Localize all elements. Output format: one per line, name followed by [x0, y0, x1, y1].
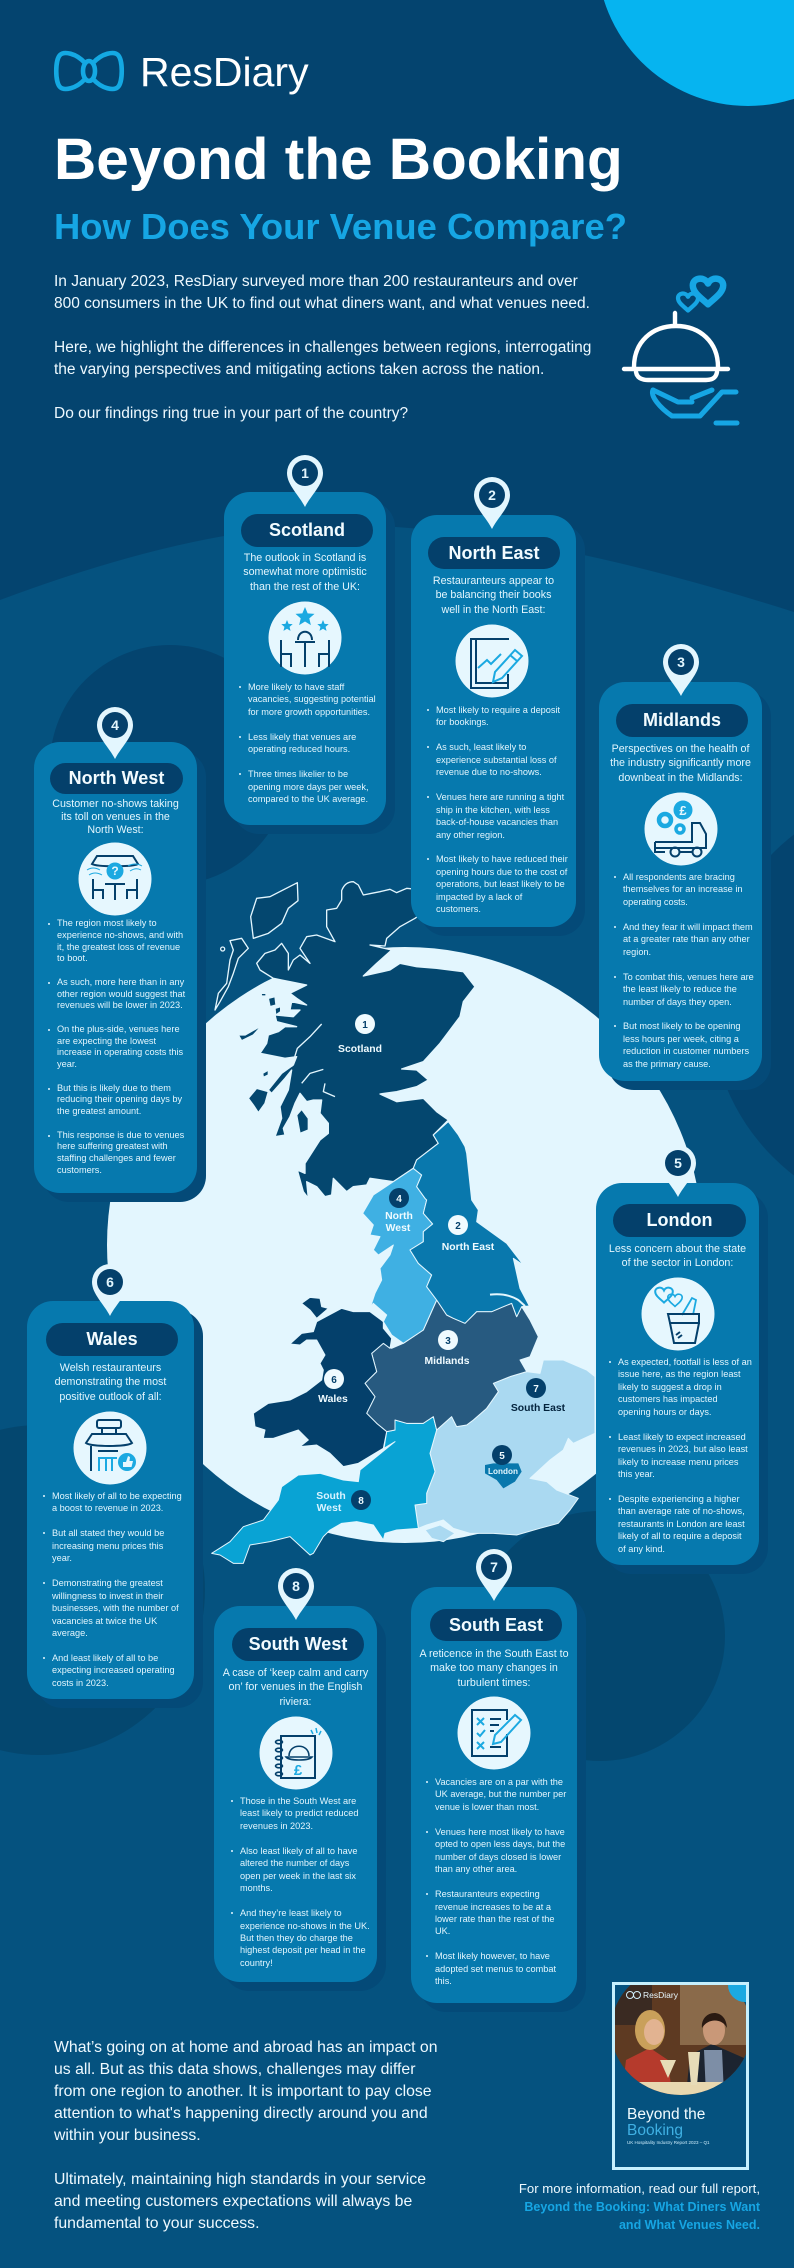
closing text: fundamental to your success. [54, 2215, 259, 2232]
intro text: Here, we highlight the differences in challenges between regions, interrogating [54, 339, 591, 356]
heading: South West: South West [249, 1634, 347, 1654]
bullets: London: likely to suggest a drop in [618, 1382, 722, 1392]
panel: North East [411, 515, 576, 927]
intro: South East: turbulent times: [457, 1677, 531, 1689]
logo wordmark: ResDiary [140, 49, 309, 95]
bullets: North East: operations, but least likely to be [436, 879, 565, 889]
bullets: London: As expected, footfall is less of an [618, 1357, 752, 1367]
closing text: from one region to another. It is important to pay close [54, 2083, 432, 2100]
bullets: North West: As such, more here than in any [57, 977, 184, 987]
icon: awning and table with question mark: ? [111, 864, 119, 878]
bullets: Scotland [239, 682, 376, 804]
bullets: South East [426, 1777, 566, 1986]
call to action [519, 2181, 760, 2232]
bullets: South West: country! [240, 1958, 273, 1968]
intro: Wales: demonstrating the most [55, 1376, 166, 1388]
bullets: North East: Venues here are running a tight [436, 792, 564, 802]
bullets: London: Despite experiencing a higher [618, 1494, 740, 1504]
bullets: South East: opted to open less days, but the [435, 1839, 565, 1849]
bullets: South West: months. [240, 1883, 273, 1893]
label: Midlands: Midlands [424, 1356, 470, 1367]
bullets: Midlands: the least likely to reduce the [623, 984, 737, 994]
pin 8 [278, 1568, 314, 1620]
icon: tablet and pen [456, 624, 528, 698]
label: South West [316, 1490, 371, 1514]
intro: North West: Customer no-shows taking [52, 798, 179, 810]
bullets: North East: for bookings. [436, 717, 489, 727]
intro: North East: well in the North East: [442, 604, 545, 616]
pin 1 [287, 455, 323, 507]
map region: North East [410, 1122, 529, 1323]
bullets: South East: revenue increases to be at a [435, 1902, 551, 1912]
intro: South West: riviera: [279, 1696, 312, 1708]
pin 2: 2 [488, 487, 496, 503]
bullets: South West: But then they do charge the [240, 1933, 353, 1943]
intro: North East [433, 575, 554, 616]
pin 4 [97, 707, 133, 759]
bullets: Wales: Demonstrating the greatest [52, 1578, 163, 1588]
heading: North West [50, 763, 183, 794]
intro: Scotland: The outlook in Scotland is [244, 552, 366, 564]
bullets: Wales: a boost to revenue in 2023. [52, 1503, 163, 1513]
icon: awning and table with question mark [78, 842, 152, 916]
bullets: South East: Restauranteurs expecting [435, 1889, 540, 1899]
panel: Scotland [224, 492, 386, 825]
bullets: South West: least likely to predict reduced [240, 1808, 358, 1818]
intro: Scotland: somewhat more optimistic [243, 566, 367, 578]
intro text: Do our findings ring true in your part of the country? [54, 405, 408, 422]
panel: Wales [27, 1301, 194, 1699]
bullets: South West: open per week in the last six [240, 1871, 356, 1881]
pin 7 [476, 1549, 512, 1601]
map region: Scotland [215, 882, 475, 1198]
bullets: North West: reducing their opening days by [57, 1094, 182, 1104]
bullets: North West: staffing challenges and fewer [57, 1153, 176, 1163]
intro: North East: Restauranteurs appear to [433, 575, 554, 587]
cover logo: Booking [627, 2122, 683, 2139]
bullets: London: Least likely to expect increased [618, 1432, 746, 1442]
bullets: South West: revenues in 2023. [240, 1821, 313, 1831]
bullets: Wales: But all stated they would be [52, 1528, 164, 1538]
call to action: For more information, read our full report, [519, 2181, 760, 2196]
bullets: North West: the greatest amount. [57, 1106, 141, 1116]
intro: Midlands: downbeat in the Midlands: [618, 772, 743, 784]
icon: table with stars [268, 602, 342, 674]
intro: Wales: positive outlook of all: [59, 1391, 162, 1403]
bullets: North West: are expecting the lowest [57, 1036, 156, 1046]
bullets: North West: other region would suggest that [57, 988, 185, 998]
pin 4: 4 [111, 717, 119, 733]
intro: Scotland: than the rest of the UK: [250, 581, 360, 593]
bullets: North East [427, 705, 568, 914]
label: North West: North [385, 1211, 413, 1222]
bullets: Wales: And least likely of all to be [52, 1653, 158, 1663]
bullets: South West: highest deposit per head in the [240, 1945, 366, 1955]
bullets: North East: As such, least likely to [436, 742, 526, 752]
bullets: Midlands: reduction in customer numbers [623, 1046, 749, 1056]
bullets: London: restaurants in London are least [618, 1519, 745, 1529]
bullets: Midlands: To combat this, venues here are [623, 972, 754, 982]
pin 2 [474, 477, 510, 529]
bullets: South East: number of days closed is lower [435, 1852, 561, 1862]
bullets: Scotland: Three times likelier to be [248, 769, 348, 779]
heading: North East: North East [448, 543, 540, 563]
map region: North West [363, 1168, 437, 1343]
bullets: Wales: average. [52, 1628, 88, 1638]
intro: South East [419, 1648, 569, 1689]
bullets: North West: year. [57, 1059, 77, 1069]
title: Beyond the Booking [54, 127, 623, 192]
intro: North West: its toll on venues in the [61, 811, 170, 823]
label: North West: 4 [396, 1194, 402, 1205]
intro: Scotland [243, 552, 367, 593]
closing text [54, 2039, 437, 2232]
label: South East: South East [511, 1403, 566, 1414]
bullets: Wales: expecting increased operating [52, 1665, 175, 1675]
bullets: North East: Most likely to require a deposit [436, 705, 560, 715]
bullets: South East: Most likely however, to have [435, 1951, 550, 1961]
bullets: London: this year. [618, 1469, 655, 1479]
bullets: Midlands: themselves for an increase in [623, 884, 742, 894]
bullets: North West: it, the greatest loss of revenue [57, 942, 180, 952]
bullets: North East: back-of-house vacancies than [436, 817, 558, 827]
label: North East: North East [442, 1242, 495, 1253]
bullets: Scotland: operating reduced hours. [248, 744, 350, 754]
icon: bow logo mark [54, 50, 124, 92]
intro text: In January 2023, ResDiary surveyed more than 200 restauranteurs and over [54, 273, 578, 290]
label: Midlands [424, 1330, 470, 1367]
bullets: Scotland: vacancies, suggesting potential [248, 694, 376, 704]
label: South East [511, 1378, 566, 1414]
panel: South West [214, 1606, 377, 1982]
bullets: South East: venue is lower than most. [435, 1802, 539, 1812]
intro: Wales: Welsh restauranteurs [60, 1362, 161, 1374]
intro: South West: on’ for venues in the English [229, 1681, 362, 1693]
intro: Midlands: Perspectives on the health of [612, 743, 749, 755]
bullets: Wales: willingness to invest in their [52, 1591, 163, 1601]
panel: London [596, 1183, 759, 1565]
intro: South West: A case of ‘keep calm and carry [223, 1667, 368, 1679]
heading: Wales: Wales [86, 1329, 138, 1349]
pin 3: 3 [677, 654, 685, 670]
map region: South East [415, 1360, 595, 1535]
bullets: Midlands: operating costs. [623, 897, 688, 907]
bullets: Wales: year. [52, 1553, 72, 1563]
label: Wales [318, 1369, 348, 1405]
cover logo: Beyond the [627, 2106, 705, 2123]
label: Wales: Wales [318, 1394, 348, 1405]
pin 5: 5 [674, 1155, 682, 1171]
map regions: England and Wales [212, 1122, 595, 1563]
bullets: Scotland: More likely to have staff [248, 682, 344, 692]
intro: North East: be balancing their books [436, 589, 551, 601]
bullets: South East: this. [435, 1976, 452, 1986]
bullets: Midlands: number of days they open. [623, 996, 732, 1006]
intro: Wales [55, 1362, 166, 1403]
heading: Wales [46, 1323, 178, 1356]
label: South West: West [317, 1503, 342, 1514]
heading: Scotland [241, 514, 373, 547]
heading: South East [430, 1609, 562, 1641]
panel: Midlands [599, 682, 762, 1081]
label: Midlands: 3 [445, 1336, 451, 1347]
intro: North West [52, 798, 179, 836]
closing text: Ultimately, maintaining high standards in your service [54, 2171, 426, 2188]
intro: London [609, 1243, 746, 1269]
bullets: Scotland: for more growth opportunities. [248, 707, 370, 717]
label: South West: 8 [358, 1496, 364, 1507]
pin 6 [92, 1264, 123, 1316]
map region: Wales [253, 1308, 392, 1467]
bullets: South West: Also least likely of all to have [240, 1846, 357, 1856]
intro: South West [222, 1667, 368, 1708]
icon: cloche with hearts and hand [622, 275, 740, 426]
icon: champagne bucket and hearts [642, 1278, 714, 1350]
bullets: North West: experience no-shows, and with [57, 930, 183, 940]
bullets: North West: revenues will be lower in 2023. [57, 1000, 183, 1010]
map region: London [485, 1463, 522, 1488]
pin 6: 6 [106, 1274, 114, 1290]
heading: Scotland: Scotland [269, 520, 345, 540]
bullets: Wales [43, 1491, 182, 1688]
icon: menu with cloche [260, 1716, 332, 1790]
label: North West [385, 1188, 413, 1234]
bullets: Midlands: as the primary cause. [623, 1059, 711, 1069]
bullets: Midlands: All respondents are bracing [623, 872, 735, 882]
bullets: Wales: Most likely of all to be expecting [52, 1491, 182, 1501]
bullets: North West: On the plus-side, venues here [57, 1024, 180, 1034]
call to action: Beyond the Booking: What Diners Want [524, 2200, 760, 2214]
bullets: Midlands: less hours per week, citing a [623, 1034, 739, 1044]
bullets: South East: UK. [435, 1926, 450, 1936]
bullets: North East: any other region. [436, 830, 505, 840]
closing text: What’s going on at home and abroad has an impact on [54, 2039, 437, 2056]
bullets: Scotland: opening more days per week, [248, 782, 369, 792]
icon: shop with thumbs up [74, 1412, 146, 1484]
bullets: North West: The region most likely to [57, 918, 157, 928]
heading: Midlands [616, 704, 748, 737]
cover logo: UK Hospitality Industry Report 2023 – Q1 [627, 2140, 710, 2145]
intro text: the varying perspectives and mitigating actions taken across the nation. [54, 361, 544, 378]
bullets: South East: adopted set menus to combat [435, 1964, 556, 1974]
bullets: Midlands: region. [623, 947, 651, 957]
bullets: London: revenues in 2023, but also least [618, 1444, 748, 1454]
intro text: 800 consumers in the UK to find out what diners want, and what venues need. [54, 295, 590, 312]
icon: truck with cogs and pound [644, 792, 718, 866]
bullets: South East: lower rate than the rest of the [435, 1914, 555, 1924]
bullets: Midlands: at a greater rate than any other [623, 934, 750, 944]
bullets: London [609, 1357, 752, 1554]
bullets: London: of any kind. [618, 1544, 665, 1554]
label: Scotland: Scotland [338, 1044, 382, 1055]
panel: North West [34, 742, 197, 1193]
bullets: London: issue here, as the region least [618, 1369, 741, 1379]
intro: South East: A reticence in the South East to [419, 1648, 569, 1660]
intro: Midlands: the industry significantly more [610, 757, 751, 769]
intro: London: Less concern about the state [609, 1243, 746, 1255]
heading: South West [232, 1628, 364, 1661]
pin 5 [665, 1147, 696, 1197]
bullets: London: customers has impacted [618, 1394, 718, 1404]
bullets: Wales: increasing menu prices this [52, 1541, 163, 1551]
bullets: North West: This response is due to venues [57, 1130, 184, 1140]
subtitle: How Does Your Venue Compare? [54, 206, 627, 247]
map region: Anglesey [302, 1297, 328, 1318]
bullets: South East: than any other area. [435, 1864, 517, 1874]
closing text: and meeting customers expectations will always be [54, 2193, 412, 2210]
bullets: South West: Those in the South West are [240, 1796, 356, 1806]
call to action: and What Venues Need. [619, 2218, 760, 2232]
heading: South East: South East [449, 1615, 543, 1635]
label: Scotland [338, 1014, 382, 1055]
bullets: London: likely to increase menu prices [618, 1457, 739, 1467]
heading: London [613, 1204, 746, 1237]
label: London: London [488, 1467, 518, 1476]
bullets: Scotland: Less likely that venues are [248, 732, 356, 742]
label: South East: 7 [533, 1384, 539, 1395]
closing text: attention to what's happening directly around you and [54, 2105, 428, 2122]
bullets: Wales: vacancies at twice the UK [52, 1616, 157, 1626]
bullets: North East: customers. [436, 904, 481, 914]
pin 8: 8 [292, 1578, 300, 1594]
bullets: North West: increase in operating costs this [57, 1047, 183, 1057]
bullets: London: likely of all to require a deposit [618, 1531, 742, 1541]
bullets: North East: opening hours due to the cost of [436, 867, 567, 877]
bullets: South East: Venues here most likely to have [435, 1827, 565, 1837]
map region: South West [212, 1417, 437, 1563]
label: Wales: 6 [331, 1375, 337, 1386]
bullets: Scotland: compared to the UK average. [248, 794, 368, 804]
bullets: Midlands: And they fear it will impact them [623, 922, 753, 932]
bullets: North West: here suffering greatest with [57, 1141, 168, 1151]
label: London: 5 [499, 1451, 505, 1462]
heading: Midlands: Midlands [643, 710, 721, 730]
bullets: South West: experience no-shows in the UK. [240, 1920, 370, 1930]
closing text: us all. But as this data shows, challenges may differ [54, 2061, 415, 2078]
bullets: South East: UK average, but the number per [435, 1789, 566, 1799]
pin 3 [663, 644, 699, 696]
bullets: Midlands: But most likely to be opening [623, 1021, 740, 1031]
bullets: London: than average rate of no-shows, [618, 1506, 745, 1516]
intro: London: of the sector in London: [622, 1257, 733, 1269]
intro: South East: make too many changes in [430, 1662, 558, 1674]
bullets: London: opening hours or days. [618, 1407, 711, 1417]
bullets: South East: Vacancies are on a par with the [435, 1777, 563, 1787]
heading: London: London [646, 1210, 712, 1230]
cover logo: ResDiary [643, 1990, 679, 2000]
bullets: South West: altered the number of days [240, 1858, 349, 1868]
map region: Isle of Wight [425, 1525, 455, 1542]
bullets: North East: experience substantial loss of [436, 755, 557, 765]
bullets: North East: revenue due to no-shows. [436, 767, 542, 777]
panel: South East [411, 1587, 577, 2003]
bullets: North West: to boot. [57, 953, 88, 963]
bullets: North West: But this is likely due to them [57, 1082, 171, 1092]
bullets: Midlands [614, 872, 754, 1069]
icon: checklist and pen [458, 1696, 530, 1770]
label: North West: West [386, 1223, 411, 1234]
report cover [612, 1982, 749, 2170]
closing text: within your business. [54, 2127, 201, 2144]
bullets: North East: ship in the kitchen, with less [436, 805, 550, 815]
bullets: Wales: costs in 2023. [52, 1678, 109, 1688]
label: South West: South [316, 1491, 346, 1502]
label: Scotland: 1 [362, 1020, 368, 1031]
intro: Midlands [610, 743, 751, 784]
icon: menu with cloche: £ [294, 1762, 303, 1779]
label: London [488, 1445, 518, 1476]
map region: Midlands [365, 1300, 538, 1432]
intro text [54, 273, 591, 422]
label: North East: 2 [455, 1221, 461, 1232]
map labels [316, 1014, 566, 1514]
icon: truck with cogs and pound: £ [679, 803, 687, 818]
bullets: South West: And they’re least likely to [240, 1908, 342, 1918]
pin 7: 7 [490, 1559, 498, 1575]
heading: North East [428, 537, 560, 569]
cover logo [626, 1990, 710, 2145]
bullets: North West [48, 918, 186, 1175]
intro: North West: North West: [87, 824, 144, 836]
bullets: South West [231, 1796, 370, 1968]
label: North East [442, 1215, 495, 1253]
pin 1: 1 [301, 465, 309, 481]
bullets: North East: impacted by a lack of [436, 892, 522, 902]
bullets: North East: Most likely to have reduced their [436, 854, 568, 864]
heading: North West: North West [69, 768, 164, 788]
bullets: Wales: businesses, with the number of [52, 1603, 179, 1613]
logo: ResDiary [54, 49, 309, 95]
bullets: North West: customers. [57, 1165, 102, 1175]
